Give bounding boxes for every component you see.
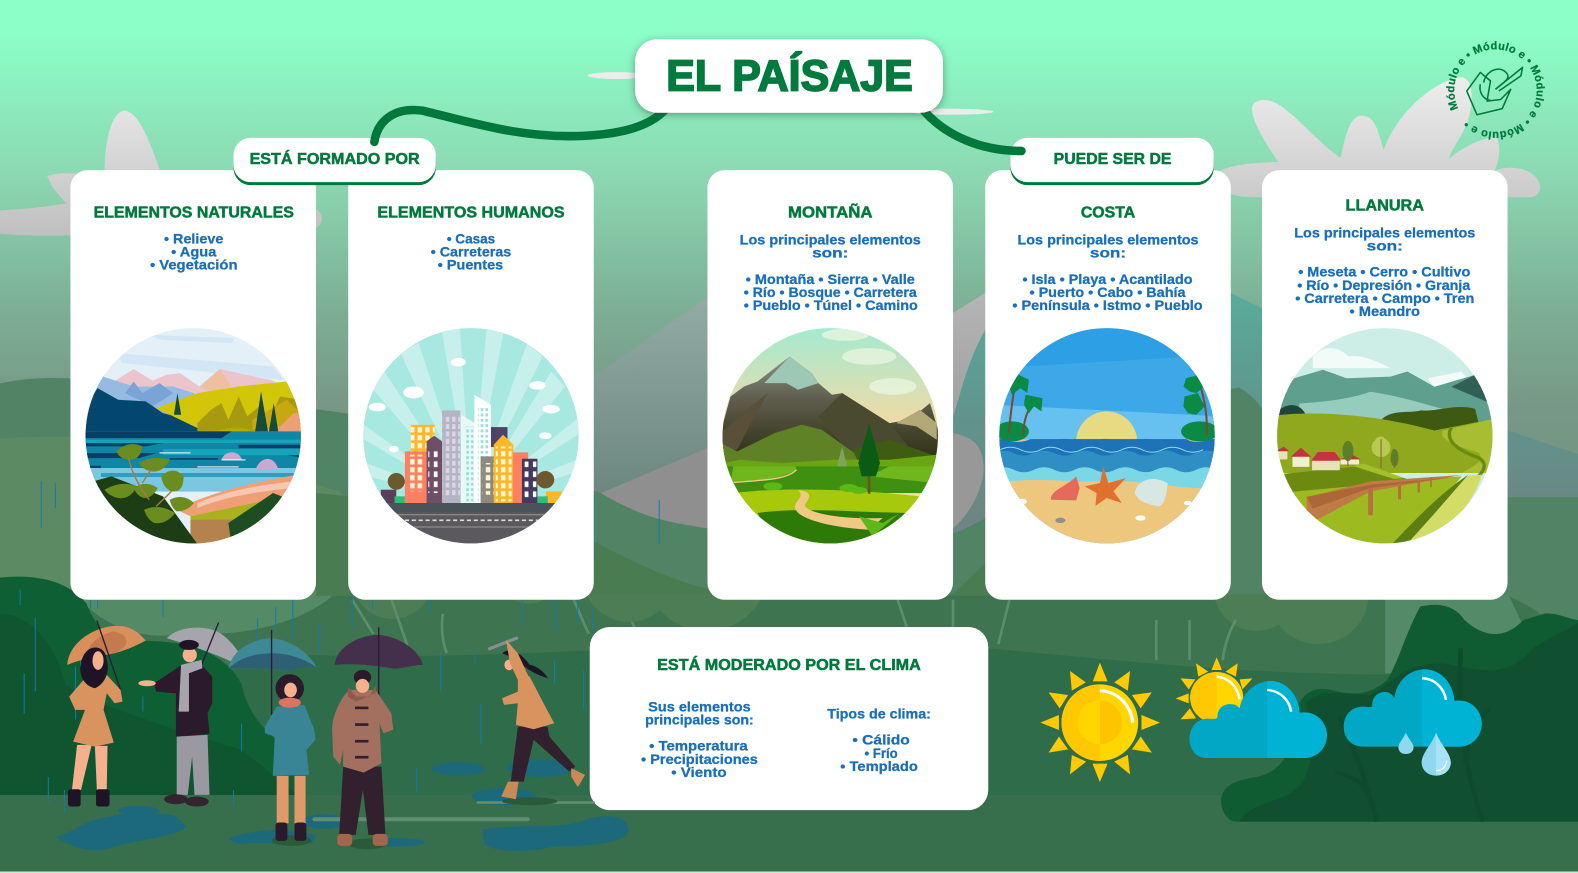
list: • Río • Depresión • Granja xyxy=(1297,277,1470,293)
list: • Isla • Playa • Acantilado xyxy=(1022,271,1193,287)
elements list xyxy=(641,698,758,780)
climate types list: • Cálido xyxy=(852,732,910,748)
list: • Puerto • Cabo • Bahía xyxy=(1030,284,1186,300)
list: • Relieve xyxy=(164,231,224,247)
elements list: Sus elementos xyxy=(648,698,751,714)
illustration: plains xyxy=(1277,328,1492,544)
person: running woman xyxy=(488,638,585,799)
list: Los principales elementos xyxy=(1017,232,1199,248)
hills: middle green xyxy=(316,493,1262,634)
list: • Carretera • Campo • Tren xyxy=(1295,290,1474,306)
list: • Meandro xyxy=(1350,303,1420,319)
icon: sun behind cloud xyxy=(1176,657,1327,758)
illustration: city xyxy=(357,326,584,546)
heading: COSTA xyxy=(1081,204,1135,221)
list: • Río • Bosque • Carretera xyxy=(744,284,917,300)
climate types list: • Frío xyxy=(864,745,898,761)
trees: darker left inner xyxy=(0,614,298,795)
list: • Vegetación xyxy=(150,257,238,273)
panel: montaña xyxy=(707,170,953,600)
mountain: teal range xyxy=(953,242,1578,624)
illustration: lake landscape xyxy=(80,326,307,546)
elements list: • Precipitaciones xyxy=(641,751,758,767)
icons: weather xyxy=(1040,657,1482,782)
climate types list: • Templado xyxy=(840,758,918,774)
list: Los principales elementos xyxy=(1294,224,1476,240)
bottom edge xyxy=(0,871,1578,873)
person: woman with teal umbrella xyxy=(228,630,316,841)
heading: LLANURA xyxy=(1346,197,1424,214)
ground: base xyxy=(0,596,1578,873)
list: Los principales elementos xyxy=(740,232,921,248)
list: • Meseta • Cerro • Cultivo xyxy=(1298,264,1471,280)
logo: módulo e: Módulo e • Módulo e • Módulo e • Módulo e • xyxy=(1446,41,1545,140)
list: son: xyxy=(812,245,848,261)
heading: ESTÁ MODERADO POR EL CLIMA xyxy=(657,655,921,674)
ground: mid band xyxy=(0,644,1578,825)
elements list: • Temperatura xyxy=(649,738,748,754)
icon: sun xyxy=(1040,663,1160,782)
icon: cloud xyxy=(1189,681,1327,758)
panel: costa xyxy=(985,170,1231,600)
person: man with gray umbrella xyxy=(138,623,239,807)
list: son: xyxy=(1090,245,1126,261)
pill: está formado por xyxy=(233,138,436,185)
trees: lit area left xyxy=(76,596,332,636)
panel: llanura xyxy=(1262,170,1508,600)
list: • Agua xyxy=(171,244,217,260)
panel: clima xyxy=(590,627,988,810)
list: • Casas xyxy=(447,231,495,247)
panel: elementos humanos xyxy=(348,170,594,600)
mountain: gray lobe xyxy=(953,433,984,528)
person: man with purple umbrella xyxy=(332,627,423,846)
climate types list: Tipos de clima: xyxy=(827,706,931,722)
list: • Pueblo • Túnel • Camino xyxy=(744,297,918,313)
list xyxy=(1012,232,1203,313)
list: son: xyxy=(1367,238,1403,254)
heading: ELEMENTOS NATURALES xyxy=(94,204,294,221)
hills: near left green xyxy=(0,436,342,624)
trees: rounded lobes xyxy=(358,594,1368,644)
mountain: central gray xyxy=(953,231,1239,624)
ground streaks xyxy=(312,801,595,821)
mountain: left gray flank xyxy=(594,242,953,624)
pill text: ESTÁ FORMADO POR xyxy=(250,149,420,168)
people in the rain xyxy=(57,621,629,851)
trees: dark left mass xyxy=(0,577,298,795)
person: woman with orange umbrella xyxy=(67,621,145,807)
connector lines xyxy=(374,110,1021,151)
list: • Montaña • Sierra • Valle xyxy=(746,271,915,287)
illustration: beach xyxy=(993,326,1223,546)
mountain: gray triangle xyxy=(601,448,707,624)
hills: far green xyxy=(0,378,1578,654)
climate types list xyxy=(827,706,931,774)
icon: rain cloud xyxy=(1344,669,1482,776)
rain: drops xyxy=(20,481,659,813)
cloud: left gray cloud xyxy=(0,111,322,235)
list: • Península • Istmo • Pueblo xyxy=(1012,297,1203,313)
trees: trunks xyxy=(352,600,1236,660)
puddles xyxy=(57,760,629,851)
list: • Carreteras xyxy=(431,244,511,260)
elements list: principales son: xyxy=(645,712,754,728)
list xyxy=(150,231,238,273)
illustration: mountain xyxy=(717,326,947,546)
list xyxy=(1294,224,1476,319)
cloud: right gray cloud xyxy=(1213,77,1540,197)
title box xyxy=(635,39,943,113)
list xyxy=(740,232,921,313)
list xyxy=(431,231,511,273)
heading: MONTAÑA xyxy=(788,201,873,221)
pill: puede ser de xyxy=(1010,138,1214,185)
pill text: PUEDE SER DE xyxy=(1054,151,1171,168)
elements list: • Viento xyxy=(671,764,727,780)
trees: dark right mass xyxy=(1221,595,1578,822)
icon: palette and brush xyxy=(1467,67,1523,115)
list: • Puentes xyxy=(438,257,503,273)
shadows xyxy=(272,797,557,849)
title text: EL PAÍSAJE xyxy=(666,53,913,101)
cloud: thin white streaks xyxy=(588,72,993,115)
panel: elementos naturales xyxy=(70,170,316,600)
heading: ELEMENTOS HUMANOS xyxy=(377,204,565,221)
ground: front left xyxy=(0,795,1578,873)
